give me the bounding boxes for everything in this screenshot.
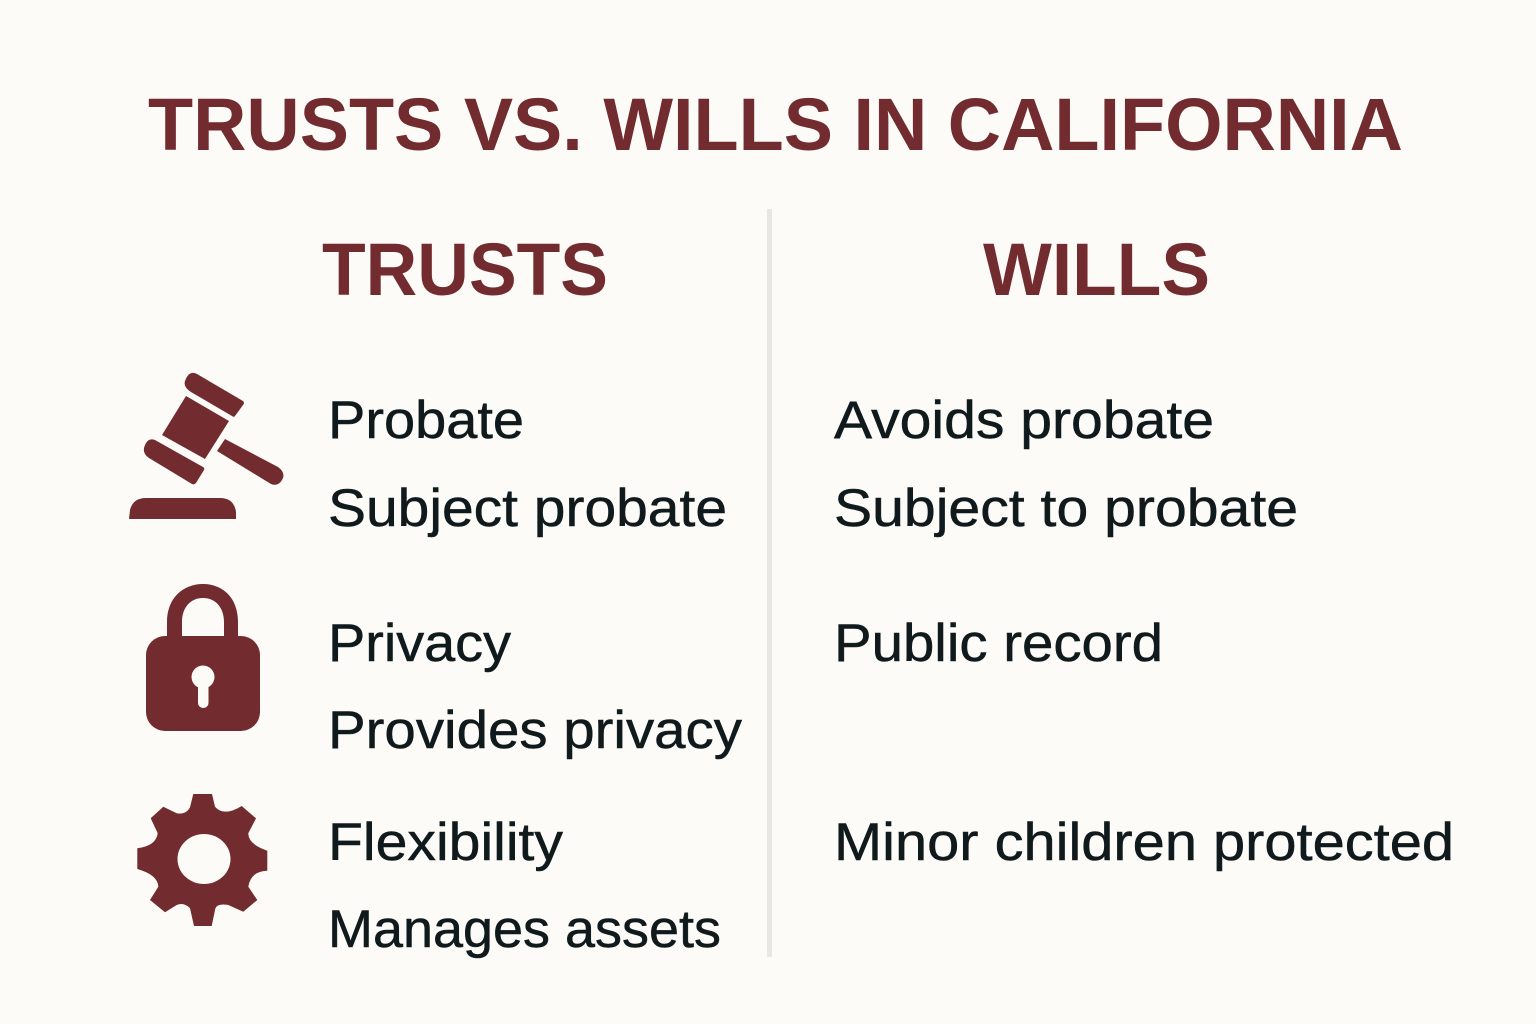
trusts: probate detail: Subject probate xyxy=(328,479,727,538)
column heading: wills: WILLS xyxy=(983,228,1210,311)
trusts: flexibility detail: Manages assets xyxy=(328,900,721,959)
icon: lock xyxy=(146,584,260,731)
wills: avoids probate: Avoids probate xyxy=(834,391,1214,450)
icon: gavel xyxy=(129,373,283,519)
trusts: privacy detail: Provides privacy xyxy=(328,701,743,760)
trusts: probate label: Probate xyxy=(328,391,524,450)
trusts: flexibility label: Flexibility xyxy=(328,813,564,872)
icon: gear xyxy=(137,794,267,926)
column heading: trusts: TRUSTS xyxy=(322,228,608,311)
wills: subject to probate: Subject to probate xyxy=(834,479,1298,538)
wills: public record: Public record xyxy=(834,614,1163,673)
wills: minor children protected: Minor children protected xyxy=(834,813,1454,872)
title: TRUSTS VS. WILLS IN CALIFORNIA xyxy=(148,83,1403,166)
trusts: privacy label: Privacy xyxy=(328,614,512,673)
